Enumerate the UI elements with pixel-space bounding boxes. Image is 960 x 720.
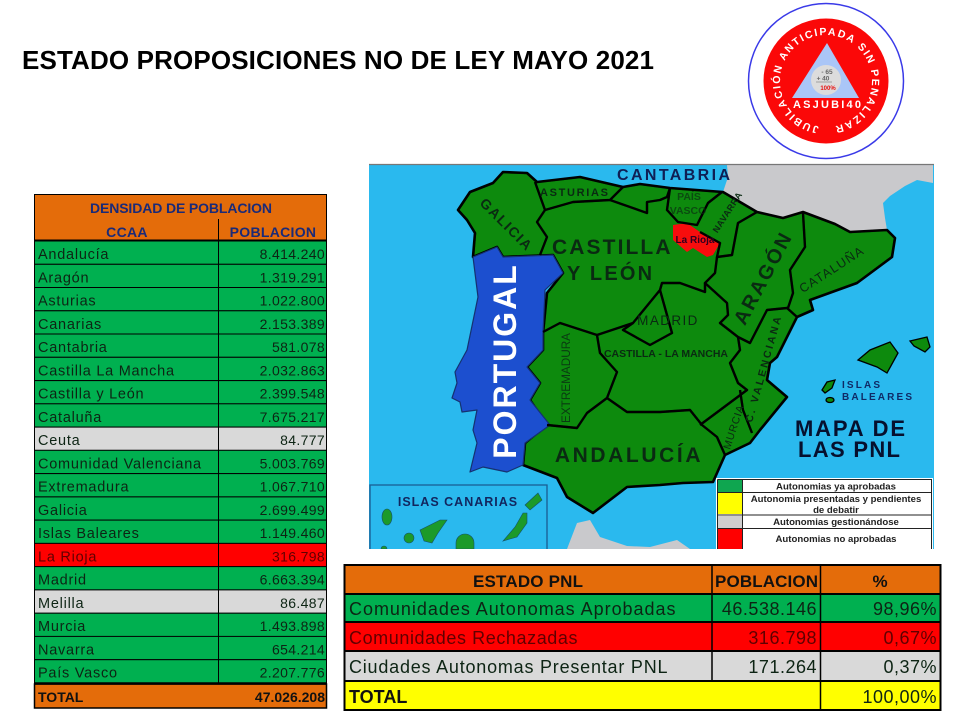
row: La Rioja: La Rioja	[38, 549, 97, 565]
row: Aragón	[34, 264, 326, 288]
row: Murcia: Murcia	[38, 619, 86, 635]
row: Cantabria	[34, 334, 326, 357]
row: Melilla	[34, 590, 326, 613]
row: País Vasco: 2.207.776	[260, 665, 325, 681]
map region labels: GALICIA	[477, 195, 536, 254]
row: rechazadas: Comunidades Rechazadas	[349, 628, 578, 648]
map region labels: MADRID	[637, 313, 699, 328]
map region labels: ISLAS	[842, 380, 880, 391]
map region labels	[398, 167, 912, 509]
row: rechazadas: 316.798	[748, 628, 817, 648]
table header: DENSIDAD DE POBLACION	[90, 200, 272, 216]
row: total	[344, 681, 940, 710]
row: Castilla y León: 2.399.548	[260, 386, 325, 402]
row: Navarra: Navarra	[38, 642, 95, 658]
La Rioja (red)	[673, 223, 720, 257]
sea background	[369, 165, 934, 549]
row: La Rioja: 316.798	[272, 548, 325, 564]
row: Andalucía: 8.414.240	[260, 246, 325, 262]
map region labels: CATALUÑA	[797, 244, 867, 296]
row: Islas Baleares: 1.149.460	[260, 525, 325, 541]
row: aprobadas: 98,96%	[873, 599, 937, 619]
summary header: ESTADO PNL	[473, 572, 583, 591]
map region labels: CASTILLA	[552, 236, 673, 259]
table header: CCAA	[106, 224, 148, 240]
row: La Rioja	[34, 543, 326, 567]
logo: ASJUBI40 badge: 100%	[820, 86, 836, 92]
row: total	[34, 684, 326, 708]
row: Ceuta: Ceuta	[38, 433, 81, 449]
summary header: %	[872, 572, 888, 591]
summary header: POBLACION	[715, 572, 818, 591]
row: Ceuta: 84.777	[280, 432, 325, 448]
row: Islas Baleares	[34, 520, 326, 543]
logo: ASJUBI40 badge: ASJUBI40	[793, 99, 861, 111]
row: Madrid	[34, 567, 326, 590]
row: Asturias: 1.022.800	[260, 292, 325, 308]
map region labels: ARAGÓN	[728, 227, 798, 329]
row: Canarias: 2.153.389	[260, 316, 325, 332]
map legend	[716, 478, 933, 549]
row: total: 100,00%	[862, 687, 937, 707]
map legend: Autonomias no aprobadas	[776, 534, 896, 545]
Africa (grey)	[567, 520, 690, 549]
row: Aragón: 1.319.291	[260, 269, 325, 285]
table header: POBLACION	[230, 224, 316, 240]
row: Galicia	[34, 497, 326, 520]
row: Canarias	[34, 311, 326, 334]
map of Spain by PNL status	[369, 164, 934, 549]
row: Castilla y León	[34, 381, 326, 404]
row: Ceuta	[34, 427, 326, 450]
row: ciudades: 0,37%	[883, 657, 937, 677]
Canary Islands box	[370, 485, 547, 549]
Canary Islands	[381, 493, 542, 549]
map region labels: MAPA DE	[795, 416, 905, 441]
row: Comunidad Valenciana: 5.003.769	[260, 455, 325, 471]
map region labels: BALEARES	[842, 392, 912, 403]
row: Navarra: 654.214	[272, 641, 325, 657]
top edge line	[369, 164, 934, 166]
map region labels: CANTABRIA	[617, 167, 730, 184]
row: Extremadura	[34, 474, 326, 497]
Spain mainland	[458, 172, 895, 513]
map legend: Autonomias ya aprobadas	[776, 482, 896, 492]
Balearic Islands	[822, 337, 930, 402]
row: Castilla y León: Castilla y León	[38, 387, 144, 403]
map region labels: ASTURIAS	[540, 187, 608, 199]
row: Castilla La Mancha	[34, 357, 326, 381]
row: total: 47.026.208	[255, 689, 325, 705]
row: aprobadas: 46.538.146	[722, 599, 817, 619]
table: estado PNL	[344, 565, 941, 710]
row: Melilla: 86.487	[280, 595, 325, 611]
row: rechazadas	[344, 622, 940, 651]
row: total: TOTAL	[349, 687, 407, 707]
France (grey)	[723, 165, 933, 232]
row: Madrid: Madrid	[38, 573, 87, 589]
map region labels: PORTUGAL	[487, 263, 523, 459]
row: Melilla: Melilla	[38, 596, 85, 612]
row: Murcia: 1.493.898	[260, 618, 325, 634]
row: País Vasco: País Vasco	[38, 666, 118, 682]
row: Asturias: Asturias	[38, 294, 96, 310]
row: Galicia: 2.699.499	[260, 502, 325, 518]
row: Andalucía: Andalucía	[38, 247, 109, 263]
logo: ASJUBI40 badge: + 40	[817, 76, 830, 82]
row: Aragón: Aragón	[38, 270, 89, 286]
row: Castilla La Mancha: Castilla La Mancha	[38, 363, 175, 379]
row: País Vasco	[34, 660, 326, 683]
map legend: de debatir	[813, 505, 859, 516]
map region labels: VASCO	[670, 205, 706, 217]
row: Comunidad Valenciana	[34, 450, 326, 474]
row: Islas Baleares: Islas Baleares	[38, 526, 140, 542]
table: densidad de poblacion	[34, 194, 327, 708]
map region labels: LAS PNL	[798, 437, 900, 462]
row: Andalucía	[34, 241, 326, 264]
row: total: TOTAL	[38, 689, 84, 705]
map region labels: MURCIA	[721, 403, 747, 451]
summary header	[344, 565, 940, 594]
map region labels: PAÍS	[677, 190, 701, 203]
map legend: Autonomia presentadas y pendientes	[751, 494, 921, 505]
regional borders	[535, 182, 805, 455]
map region labels: EXTREMADURA	[559, 333, 573, 423]
row: ciudades	[344, 651, 940, 681]
row: Extremadura: 1.067.710	[260, 479, 325, 495]
row: rechazadas: 0,67%	[883, 628, 937, 648]
logo: ASJUBI40 badge: JUBILACIÓN ANTICIPADA SIN PENALIZAR	[770, 28, 880, 134]
row: Galicia: Galicia	[38, 503, 88, 519]
map region labels: Y LEÓN	[567, 261, 654, 285]
row: Cantabria: Cantabria	[38, 340, 108, 356]
Portugal	[452, 247, 563, 472]
row: Cantabria: 581.078	[272, 339, 325, 355]
map region labels: C. VALENCIANA	[743, 315, 784, 424]
row: Extremadura: Extremadura	[38, 480, 129, 496]
row: Cataluña: 7.675.217	[260, 409, 325, 425]
title: ESTADO PROPOSICIONES NO DE LEY MAYO 2021	[22, 45, 654, 75]
row: Asturias	[34, 288, 326, 311]
map legend: Autonomias gestionándose	[773, 517, 899, 528]
row: Castilla La Mancha: 2.032.863	[260, 362, 325, 378]
row: ciudades: Ciudades Autonomas Presentar PNL	[349, 657, 668, 677]
map region labels: ANDALUCÍA	[555, 444, 703, 467]
row: Navarra	[34, 636, 326, 660]
row: Cataluña: Cataluña	[38, 410, 102, 426]
logo: ASJUBI40 badge: - 65	[821, 69, 833, 76]
map region labels: CASTILLA - LA MANCHA	[604, 348, 728, 360]
row: Comunidad Valenciana: Comunidad Valenciana	[38, 456, 202, 472]
row: Canarias: Canarias	[38, 317, 102, 333]
map region labels: NAVARRA	[711, 190, 744, 235]
row: aprobadas: Comunidades Autonomas Aprobadas	[349, 599, 676, 619]
table header	[34, 194, 326, 240]
row: Murcia	[34, 613, 326, 636]
row: Madrid: 6.663.394	[260, 572, 325, 588]
row: Cataluña	[34, 404, 326, 427]
logo: ASJUBI40 badge	[748, 2, 904, 160]
map region labels: ISLAS CANARIAS	[398, 495, 518, 509]
row: ciudades: 171.264	[748, 657, 817, 677]
map region labels: La Rioja	[676, 235, 715, 246]
row: aprobadas	[344, 594, 940, 622]
